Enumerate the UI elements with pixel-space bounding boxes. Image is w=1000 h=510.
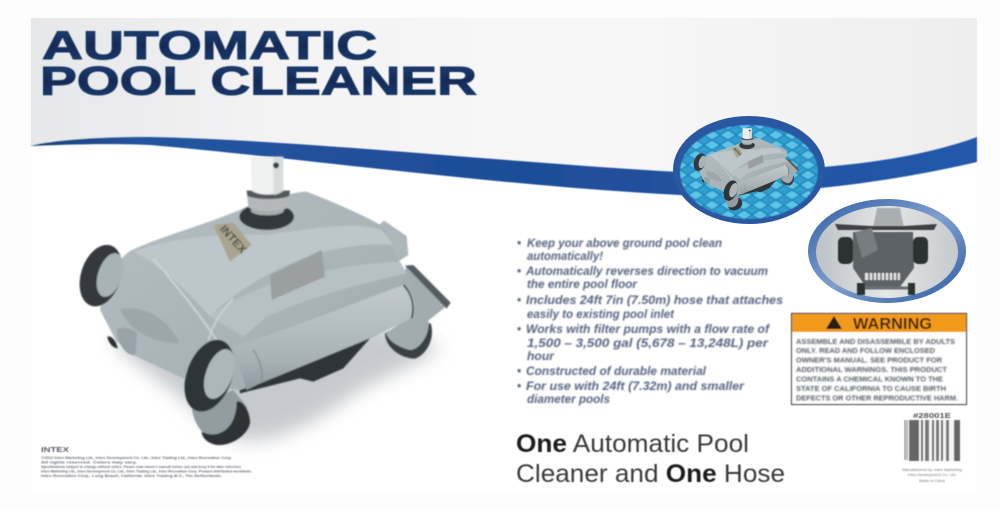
warning text: OWNER'S MANUAL. SEE PRODUCT FOR (796, 356, 943, 364)
warning text: ONLY. READ AND FOLLOW ENCLOSED (796, 346, 936, 355)
feature bullet list: • (517, 295, 521, 307)
feature bullet list: automatically! (527, 251, 603, 263)
feature bullet list: • (517, 366, 521, 378)
warning icon (826, 316, 842, 329)
blue oval frame (808, 199, 966, 303)
manufacturer note: Intex Development Co. Ltd. (908, 472, 956, 477)
contents statement: Cleaner and One Hose (516, 460, 785, 488)
feature bullet list: the entire pool floor (527, 279, 638, 291)
warning text: DEFECTS OR OTHER REPRODUCTIVE HARM. (796, 394, 958, 402)
grey interior (816, 206, 958, 298)
rear right wheel (385, 323, 432, 359)
contents statement (516, 430, 785, 488)
data plate (270, 250, 325, 300)
feature bullet list: easily to existing pool inlet (527, 309, 675, 321)
side intake (117, 328, 137, 355)
front wheel rim (202, 401, 250, 445)
blue wave (30, 137, 977, 195)
manufacturer note (902, 467, 962, 483)
rear box (373, 221, 408, 263)
warning text: CONTAINS A CHEMICAL KNOWN TO THE (796, 374, 943, 384)
main product: pool cleaner robot (72, 157, 451, 445)
manufacturer note: Manufactured by: Intex Marketing (902, 467, 962, 472)
elbow dark lip (405, 265, 451, 309)
right elbow (386, 265, 450, 350)
rear-left intake ring (72, 239, 130, 312)
main body (100, 192, 412, 390)
manufacturer note: Made in China (919, 478, 946, 483)
front intake ring (175, 333, 243, 418)
feature bullet list: • (517, 324, 521, 336)
INTEX label (213, 223, 252, 262)
legal fine print (41, 445, 252, 478)
feature bullet list: Includes 24ft 7in (7.50m) hose that attaches (526, 295, 783, 307)
underside of cleaner (835, 208, 937, 295)
floor shadow under cleaner (110, 300, 440, 441)
blue oval frame (673, 116, 825, 224)
front tube (233, 285, 414, 390)
dark underside (237, 337, 370, 393)
legal fine print: ©2012 Intex Marketing Ltd., Intex Development Co. Ltd., Intex Trading Ltd., Intex Recreation Corp. (41, 455, 232, 460)
warning box: WARNING (853, 316, 932, 333)
feature bullet list: • (517, 238, 521, 250)
legal fine print: Intex Marketing Ltd., Intex Development Co. Ltd., Intex Trading Ltd., Intex Recreation Corp. Product distributed worldwide. (41, 468, 252, 474)
body highlights (133, 226, 393, 317)
feature bullet list: Keep your above ground pool clean (527, 238, 722, 250)
feature bullet list: hour (527, 351, 555, 363)
title (40, 23, 477, 103)
warning text: ADDITIONAL WARNINGS. THIS PRODUCT (796, 365, 947, 374)
feature bullet list (517, 238, 783, 406)
pool floor (680, 125, 818, 219)
front wheel housing (192, 390, 247, 442)
legal fine print: All rights reserved. Colors may vary. (41, 460, 137, 464)
legal fine print: INTEX (41, 445, 69, 454)
inset: underside view (808, 199, 966, 303)
hose clamp (247, 191, 290, 211)
hose gasket (239, 203, 294, 230)
warning box (792, 314, 966, 404)
feature bullet list: 1,500 – 3,500 gal (5,678 – 13,248L) per (527, 338, 769, 350)
hose neck (251, 157, 283, 195)
product code: #28001E (913, 413, 951, 420)
warning header (792, 314, 966, 332)
warning text: STATE OF CALIFORNIA TO CAUSE BIRTH (796, 384, 946, 393)
legal fine print: Specifications subject to change without notice. Please read owner's manual before use and keep it for later reference. (41, 464, 242, 469)
legal fine print: Intex Recreation Corp., Long Beach, California. Intex Trading B.V., The Netherlands. (41, 473, 222, 478)
feature bullet list: Automatically reverses direction to vacuum (525, 266, 768, 278)
INTEX label: INTEX (217, 223, 249, 256)
title: POOL CLEANER (40, 59, 477, 103)
small cleaner (692, 128, 799, 210)
inset: robot in pool (673, 116, 825, 224)
feature bullet list: Constructed of durable material (526, 366, 707, 378)
feature bullet list: • (517, 381, 521, 393)
feature bullet list: For use with 24ft (7.32m) and smaller (526, 381, 745, 393)
contents statement: One Automatic Pool (516, 430, 749, 458)
feature bullet list: Works with filter pumps with a flow rate of (526, 324, 770, 336)
barcode (905, 420, 960, 461)
title: AUTOMATIC (42, 23, 377, 68)
warning text (796, 337, 958, 402)
warning text: ASSEMBLE AND DISASSEMBLE BY ADULTS (796, 337, 955, 346)
header band (31, 18, 977, 172)
feature bullet list: diameter pools (527, 394, 610, 406)
feature bullet list: • (517, 266, 521, 278)
